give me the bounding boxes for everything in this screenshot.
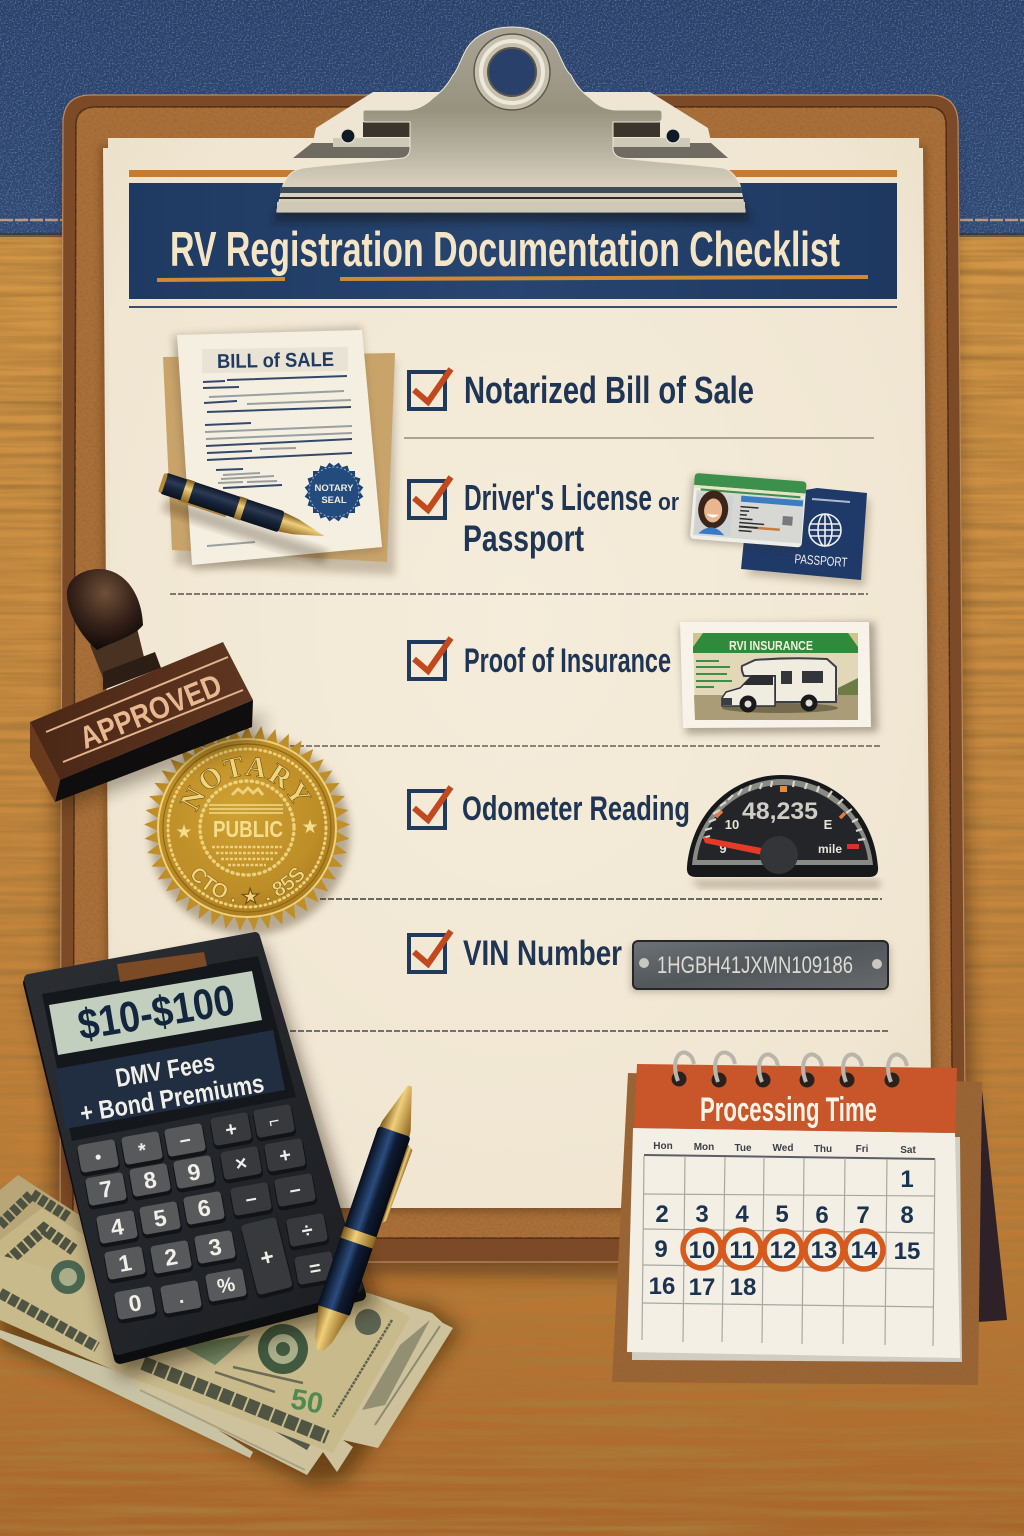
date numbers: 8 (900, 1202, 914, 1229)
RV vehicle (722, 658, 838, 713)
icon: passport (741, 488, 870, 586)
icon: VIN plate: 1HGBH41JXMN109186 (657, 952, 853, 979)
calculator keys: – (288, 1178, 302, 1202)
row 2: driver's license or passport: Passport (463, 518, 584, 559)
odometer digits: 48,235 (742, 798, 818, 825)
calculator keys: 2 (162, 1243, 180, 1271)
calendar: processing time (610, 1052, 1007, 1388)
row 1: notarized bill of sale: Notarized Bill of Sale (464, 370, 754, 412)
calculator keys: ⌐ (267, 1110, 281, 1132)
icon: notary seal: SEAL (321, 495, 347, 506)
date numbers: 17 (689, 1274, 715, 1301)
notary public gold seal (144, 726, 354, 939)
notary public gold seal: ★ (175, 822, 193, 843)
calendar grid (642, 1155, 935, 1346)
metal clip (272, 27, 752, 222)
row 1: notarized bill of sale (404, 369, 874, 438)
notary public gold seal: ★ (301, 817, 319, 838)
calculator keys: 0 (126, 1289, 144, 1317)
icon: odometer gauge (687, 775, 880, 888)
calculator keys: + (257, 1243, 277, 1271)
date numbers: 12 (770, 1237, 796, 1264)
row 3: proof of insurance: Proof of Insurance (464, 642, 671, 680)
row 5: VIN number: VIN Number (463, 934, 622, 973)
row 3: proof of insurance (170, 638, 880, 746)
dollar bills: 50 (288, 1383, 326, 1421)
title banner (129, 170, 897, 308)
icon: driver's license (688, 473, 807, 549)
calculator keys: • (93, 1147, 103, 1167)
calculator keys: = (308, 1257, 323, 1281)
calculator keys: 3 (206, 1233, 224, 1261)
label: DMV fees (55, 1030, 285, 1129)
calculator keys: – (178, 1128, 192, 1152)
date numbers: 2 (655, 1201, 669, 1228)
icon: passport: PASSPORT (794, 551, 848, 570)
row 2: driver's license or passport: or (658, 489, 679, 516)
row 2: driver's license or passport (170, 477, 868, 594)
calculator keys: * (137, 1139, 148, 1162)
calculator keys (76, 1104, 338, 1324)
clipboard board (50, 95, 978, 1275)
date numbers: 11 (729, 1237, 755, 1264)
stamp handle (67, 569, 161, 690)
date numbers: 9 (654, 1236, 668, 1263)
date numbers (649, 1166, 920, 1301)
row 4: odometer reading: Odometer Reading (462, 790, 690, 828)
icon: odometer gauge: mile (818, 842, 842, 856)
row 5: VIN number (290, 931, 888, 1031)
calculator keys: 4 (108, 1213, 126, 1241)
weekday labels: Sat (900, 1145, 916, 1156)
calculator keys: 6 (195, 1194, 213, 1222)
calculator keys: – (244, 1187, 258, 1211)
row 4: odometer reading (320, 787, 882, 899)
weekday labels: Mon (694, 1142, 714, 1153)
heading: bill of sale: BILL of SALE (217, 349, 334, 373)
calendar header: Processing Time (700, 1091, 877, 1129)
date numbers: 10 (689, 1237, 715, 1264)
label: DMV fees: + Bond Premiums (78, 1068, 266, 1128)
binder rings (672, 1052, 907, 1088)
denim backdrop with stitching (0, 0, 1024, 237)
date numbers: 18 (730, 1274, 756, 1301)
date numbers: 7 (856, 1202, 870, 1229)
icon: VIN plate (631, 941, 890, 992)
weekday labels: Hon (653, 1141, 673, 1152)
weekday labels (653, 1141, 916, 1156)
notary public gold seal: NOTARY (180, 756, 312, 812)
calculator keys: % (216, 1274, 237, 1298)
weekday labels: Tue (734, 1143, 752, 1154)
document text lines (203, 376, 352, 546)
weekday labels: Fri (856, 1144, 869, 1155)
date numbers: 1 (900, 1166, 914, 1193)
approved rubber stamp: APPROVED (74, 667, 227, 756)
calculator keys: . (176, 1286, 186, 1308)
icon: notary seal: NOTARY (314, 483, 354, 494)
approved rubber stamp (30, 569, 262, 810)
notary public gold seal: CTO . ★ . 85S (192, 867, 304, 906)
date numbers: 6 (815, 1202, 829, 1229)
calendar header (634, 1064, 957, 1133)
date numbers: 13 (811, 1237, 837, 1264)
date numbers: 3 (695, 1201, 709, 1228)
display: $10-$100: $10-$100 (74, 976, 238, 1050)
date numbers: 16 (649, 1273, 675, 1300)
icon: odometer gauge: 9 (719, 841, 727, 856)
icon: odometer gauge: E (824, 817, 833, 832)
weekday labels: Wed (773, 1143, 793, 1154)
date numbers: 5 (775, 1201, 789, 1228)
date numbers: 15 (894, 1238, 920, 1265)
weekday labels: Thu (814, 1144, 832, 1155)
icon: notary seal (305, 463, 363, 521)
date numbers: 4 (735, 1201, 749, 1228)
solar strip (117, 952, 207, 982)
dollar bills (0, 1175, 462, 1485)
icon: RV insurance card (680, 622, 878, 734)
icon: RV insurance card: RVI INSURANCE (729, 638, 813, 653)
calculator keys: ÷ (300, 1219, 315, 1243)
highlighted date circles (683, 1230, 883, 1269)
calculator keys: 8 (141, 1166, 159, 1194)
calculator keys: 5 (151, 1204, 169, 1232)
notary public gold seal: PUBLIC (213, 816, 283, 842)
large pen (304, 1081, 432, 1358)
panel: bill of sale document (153, 326, 395, 575)
calculator (29, 937, 378, 1378)
icon: small pen (153, 471, 336, 564)
calculator keys: + (224, 1118, 239, 1142)
date numbers: 14 (851, 1237, 878, 1264)
calculator keys: 7 (97, 1175, 115, 1203)
calculator keys: 9 (185, 1158, 203, 1186)
calculator keys: + (278, 1144, 293, 1168)
paper sheet (100, 138, 936, 1212)
calculator keys: × (234, 1152, 249, 1176)
calculator keys: 1 (116, 1249, 134, 1277)
icon: odometer gauge: 10 (725, 817, 739, 832)
label: DMV fees: DMV Fees (113, 1047, 217, 1093)
row 2: driver's license or passport: Driver's License (464, 477, 652, 518)
